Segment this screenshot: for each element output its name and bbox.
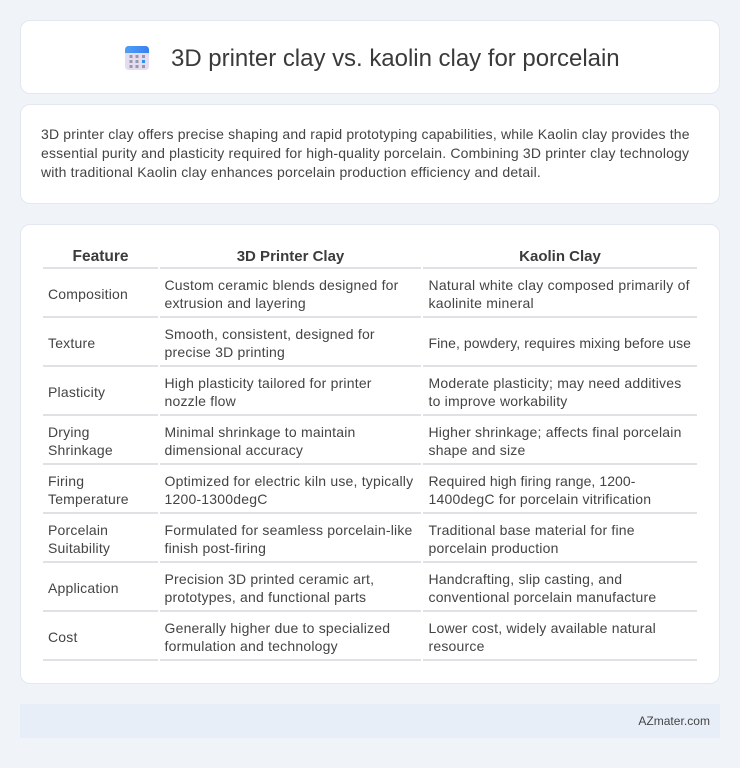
table headers bbox=[43, 248, 697, 269]
title card bbox=[20, 20, 720, 94]
row: drying shrinkage: Drying bbox=[48, 424, 90, 440]
row: cost bbox=[43, 620, 697, 661]
intro text: essential purity and plasticity required for high-quality porcelain. Combining 3D printer clay technology bbox=[41, 145, 689, 161]
row: texture: Fine, powdery, requires mixing before use bbox=[428, 335, 691, 351]
row: drying shrinkage: Minimal shrinkage to maintain bbox=[164, 424, 356, 440]
intro text: with traditional Kaolin clay enhances porcelain production efficiency and detail. bbox=[41, 164, 541, 180]
row: drying shrinkage: shape and size bbox=[428, 442, 525, 458]
row: porcelain suitability: Traditional base material for fine bbox=[428, 522, 635, 538]
row: application: Application bbox=[48, 580, 119, 596]
intro card bbox=[20, 104, 720, 204]
row: plasticity: nozzle flow bbox=[164, 393, 236, 409]
row: texture: precise 3D printing bbox=[164, 344, 285, 360]
row: composition: kaolinite mineral bbox=[428, 295, 534, 311]
row: firing temperature: 1200-1300degC bbox=[164, 491, 268, 507]
row: firing temperature bbox=[43, 473, 697, 514]
row: porcelain suitability: Suitability bbox=[48, 540, 110, 556]
intro text bbox=[41, 126, 690, 180]
intro text: 3D printer clay offers precise shaping and rapid prototyping capabilities, while Kaolin clay provides the bbox=[41, 126, 690, 142]
row: cost: resource bbox=[428, 638, 485, 654]
table card bbox=[20, 224, 720, 684]
row: firing temperature: Firing bbox=[48, 473, 84, 489]
row: cost: Generally higher due to specialized bbox=[164, 620, 390, 636]
row: composition bbox=[43, 277, 697, 318]
icon: calendar bbox=[125, 46, 149, 70]
row: porcelain suitability: porcelain production bbox=[428, 540, 559, 556]
row: plasticity bbox=[43, 375, 697, 416]
row: porcelain suitability: finish post-firing bbox=[164, 540, 266, 556]
title: 3D printer clay vs. kaolin clay for porcelain bbox=[171, 45, 620, 72]
row: texture bbox=[43, 326, 697, 367]
row: application: Handcrafting, slip casting, and bbox=[428, 571, 622, 587]
row: firing temperature: Optimized for electric kiln use, typically bbox=[164, 473, 413, 489]
row: drying shrinkage: Higher shrinkage; affects final porcelain bbox=[428, 424, 682, 440]
row: firing temperature: 1400degC for porcelain vitrification bbox=[428, 491, 651, 507]
row: texture: Texture bbox=[48, 335, 95, 351]
row: application: prototypes, and functional parts bbox=[164, 589, 366, 605]
row: porcelain suitability bbox=[43, 522, 697, 563]
row: cost: Cost bbox=[48, 629, 78, 645]
table headers: Kaolin Clay bbox=[519, 248, 601, 265]
row: drying shrinkage bbox=[43, 424, 697, 465]
row: texture: Smooth, consistent, designed for bbox=[164, 326, 375, 342]
footer credit: AZmater.com bbox=[638, 714, 710, 728]
row: application: Precision 3D printed ceramic art, bbox=[164, 571, 374, 587]
row: plasticity: High plasticity tailored for printer bbox=[164, 375, 372, 391]
row: application bbox=[43, 571, 697, 612]
row: porcelain suitability: Porcelain bbox=[48, 522, 108, 538]
row: composition: extrusion and layering bbox=[164, 295, 306, 311]
row: cost: formulation and technology bbox=[164, 638, 338, 654]
row: composition: Composition bbox=[48, 286, 128, 302]
row: composition: Natural white clay composed primarily of bbox=[428, 277, 690, 293]
row: composition: Custom ceramic blends designed for bbox=[164, 277, 399, 293]
row: firing temperature: Temperature bbox=[48, 491, 129, 507]
table headers: Feature bbox=[72, 248, 128, 265]
row: cost: Lower cost, widely available natural bbox=[428, 620, 656, 636]
row: porcelain suitability: Formulated for seamless porcelain-like bbox=[164, 522, 413, 538]
row: application: conventional porcelain manufacture bbox=[428, 589, 656, 605]
row: drying shrinkage: dimensional accuracy bbox=[164, 442, 303, 458]
row: plasticity: Moderate plasticity; may need additives bbox=[428, 375, 681, 391]
row: firing temperature: Required high firing range, 1200- bbox=[428, 473, 636, 489]
footer bar bbox=[20, 704, 720, 738]
row: plasticity: Plasticity bbox=[48, 384, 105, 400]
table headers: 3D Printer Clay bbox=[237, 248, 344, 265]
row: drying shrinkage: Shrinkage bbox=[48, 442, 113, 458]
row: plasticity: to improve workability bbox=[428, 393, 568, 409]
